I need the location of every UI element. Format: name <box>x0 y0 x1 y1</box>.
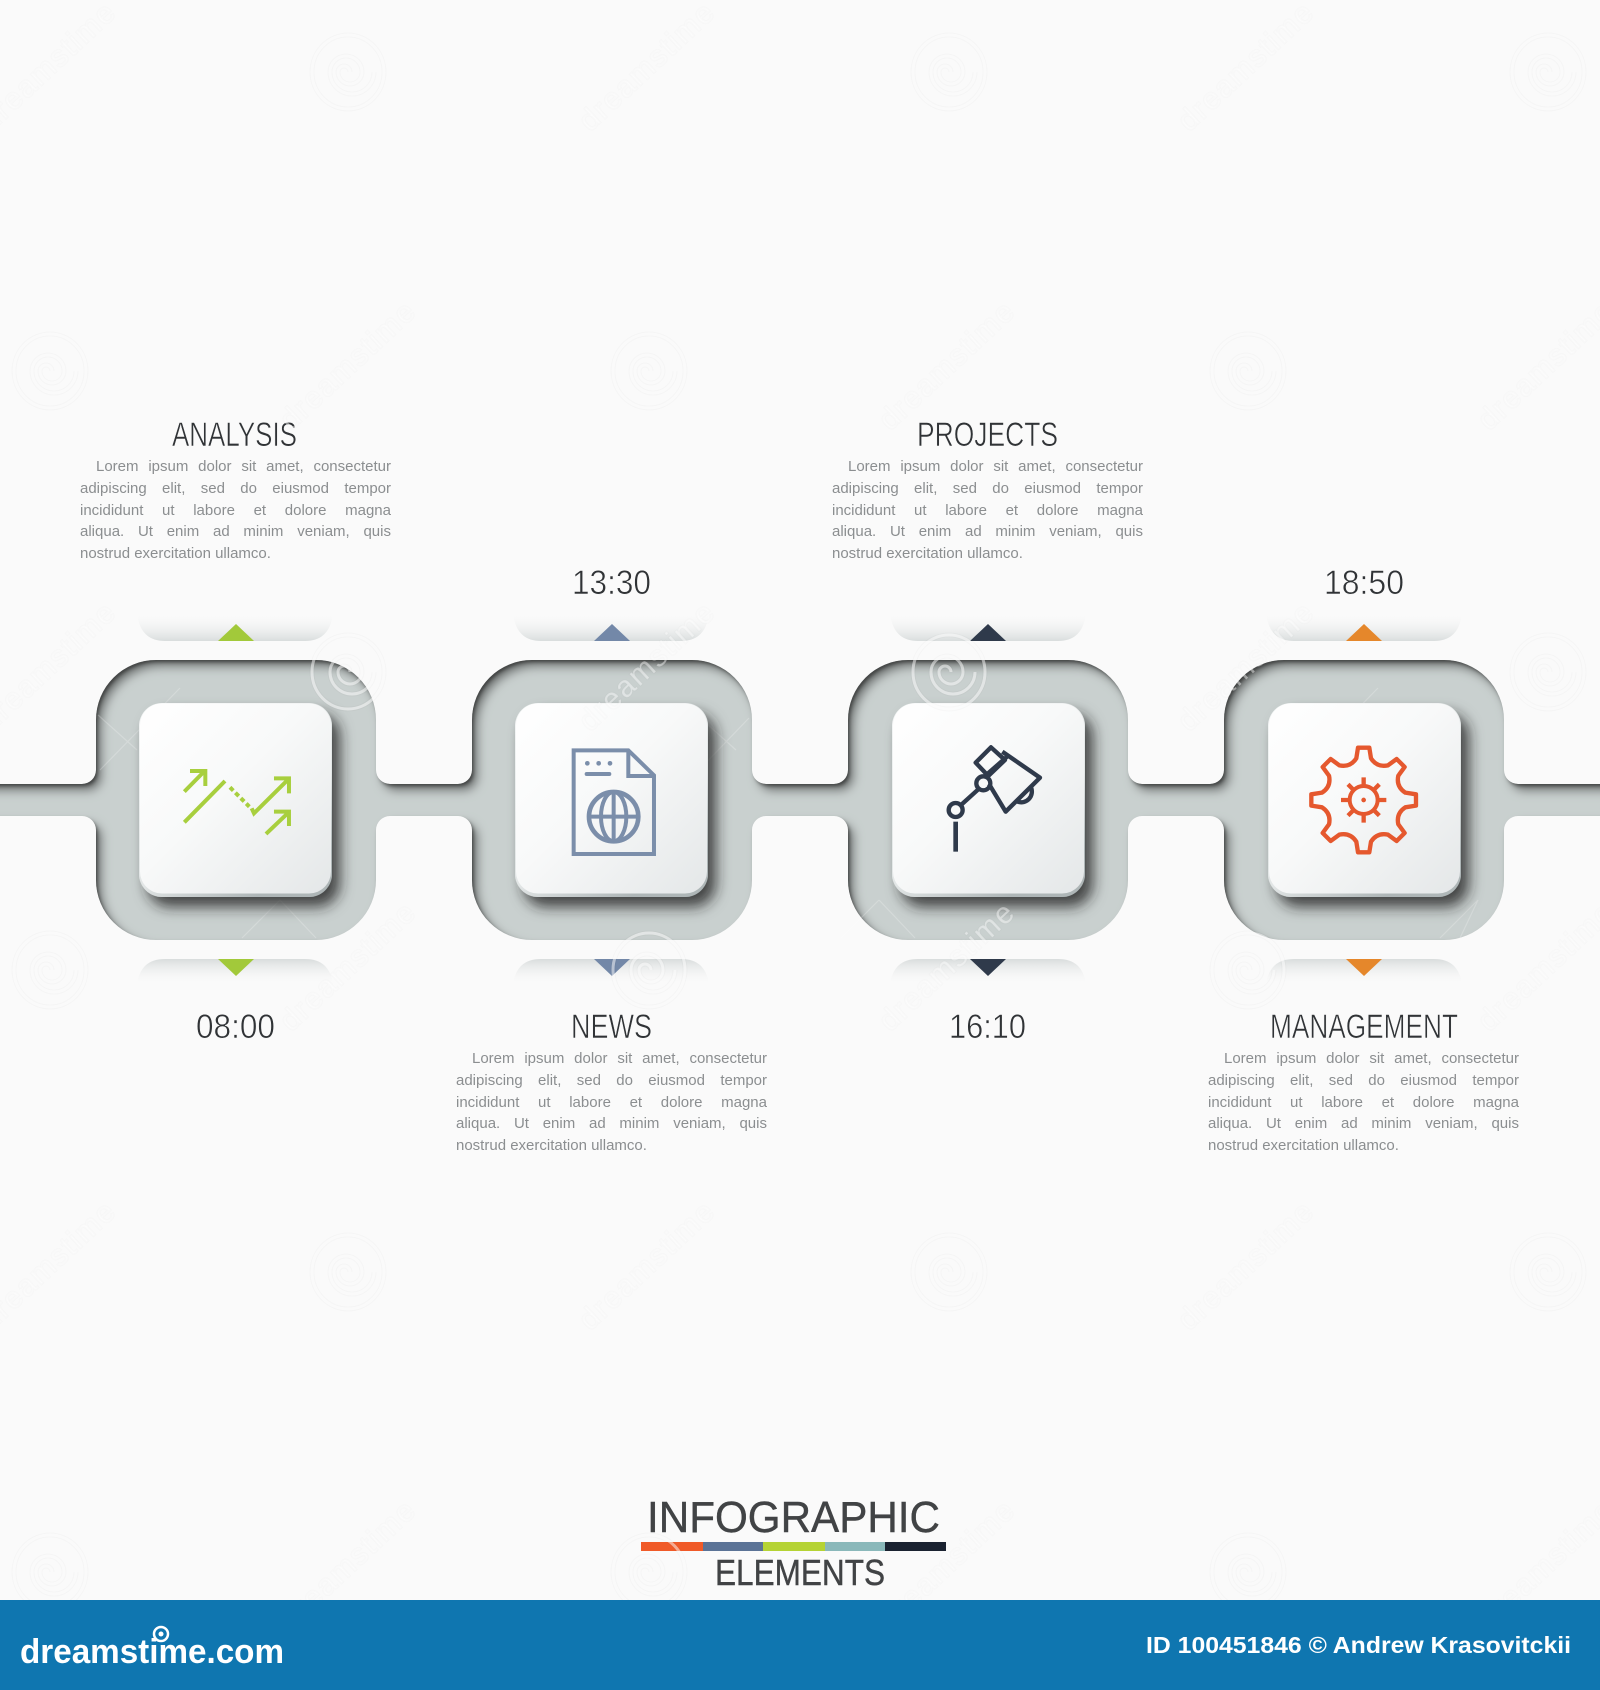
watermark words: dreamstime <box>572 0 721 138</box>
text: management description: adipiscing elit, sed do eiusmod tempor <box>1208 1072 1519 1089</box>
watermark words: dreamstime <box>872 1494 1021 1636</box>
text: management description: nostrud exercitation ullamco. <box>1208 1137 1399 1154</box>
heading: NEWS: NEWS <box>571 1008 652 1046</box>
step 1 markers <box>137 613 333 985</box>
text: news description: nostrud exercitation ullamco. <box>456 1137 647 1154</box>
heading: MANAGEMENT: MANAGEMENT <box>1270 1008 1458 1046</box>
icon: desk lamp <box>949 747 1040 852</box>
watermark words: dreamstime <box>273 896 422 1038</box>
text: analysis description <box>80 458 391 562</box>
icon: trending arrows <box>184 771 289 834</box>
time: 08:00: 08:00 <box>196 1008 275 1046</box>
logo: infographic elements <box>641 1493 946 1593</box>
text: projects description <box>832 458 1143 562</box>
text: news description: incididunt ut labore et dolore magna <box>456 1094 767 1110</box>
footer bar: dreamstime.com <box>20 1633 284 1671</box>
card 4 <box>1268 703 1461 897</box>
watermark words: dreamstime <box>1171 0 1320 138</box>
text: projects description: incididunt ut labore et dolore magna <box>832 502 1143 518</box>
text: projects description: Lorem ipsum dolor sit amet, consectetur <box>848 458 1143 475</box>
text: news description: aliqua. Ut enim ad minim veniam, quis <box>456 1115 767 1132</box>
watermark words: dreamstime <box>1171 596 1320 738</box>
text: analysis description: nostrud exercitation ullamco. <box>80 545 271 562</box>
text: news description: Lorem ipsum dolor sit amet, consectetur <box>472 1050 767 1067</box>
time: 16:10: 16:10 <box>949 1008 1026 1046</box>
step 4 markers <box>1266 613 1462 985</box>
text: analysis description: incididunt ut labore et dolore magna <box>80 502 391 518</box>
heading: ANALYSIS: ANALYSIS <box>172 416 297 454</box>
card 3 <box>892 703 1085 897</box>
step 3 markers <box>890 613 1086 985</box>
watermark words: dreamstime <box>572 1195 721 1337</box>
heading: PROJECTS: PROJECTS <box>917 416 1058 454</box>
text: analysis description: Lorem ipsum dolor sit amet, consectetur <box>96 458 391 475</box>
text: management description: incididunt ut labore et dolore magna <box>1208 1094 1519 1110</box>
text: news description <box>456 1050 767 1154</box>
card 2 <box>515 703 708 897</box>
footer bar: ID 100451846 © Andrew Krasovitckii <box>1146 1632 1571 1658</box>
text: projects description: aliqua. Ut enim ad minim veniam, quis <box>832 523 1143 540</box>
text: management description <box>1208 1050 1519 1154</box>
logo: infographic elements: INFOGRAPHIC <box>647 1493 940 1542</box>
text: projects description: nostrud exercitation ullamco. <box>832 545 1023 562</box>
watermark words: dreamstime <box>872 295 1021 437</box>
logo: infographic elements: ELEMENTS <box>715 1552 885 1593</box>
icon: gear <box>1311 748 1416 852</box>
text: news description: adipiscing elit, sed do eiusmod tempor <box>456 1072 767 1089</box>
text: analysis description: adipiscing elit, sed do eiusmod tempor <box>80 480 391 497</box>
footer bar <box>0 1600 1600 1690</box>
step 2 markers <box>513 613 709 985</box>
text: projects description: adipiscing elit, sed do eiusmod tempor <box>832 480 1143 497</box>
card 1 <box>139 703 332 897</box>
watermark words: dreamstime <box>1171 1195 1320 1337</box>
text: analysis description: aliqua. Ut enim ad minim veniam, quis <box>80 523 391 540</box>
time: 18:50: 18:50 <box>1324 564 1404 602</box>
watermark words: dreamstime <box>273 1494 422 1636</box>
watermark words: dreamstime <box>572 596 721 738</box>
watermark words: dreamstime <box>872 896 1021 1038</box>
time: 13:30: 13:30 <box>572 564 651 602</box>
text: management description: aliqua. Ut enim ad minim veniam, quis <box>1208 1115 1519 1132</box>
icon: document with globe <box>574 750 654 854</box>
watermark words: dreamstime <box>273 295 422 437</box>
ribbon: connected frames <box>0 660 1600 940</box>
text: management description: Lorem ipsum dolor sit amet, consectetur <box>1224 1050 1519 1067</box>
